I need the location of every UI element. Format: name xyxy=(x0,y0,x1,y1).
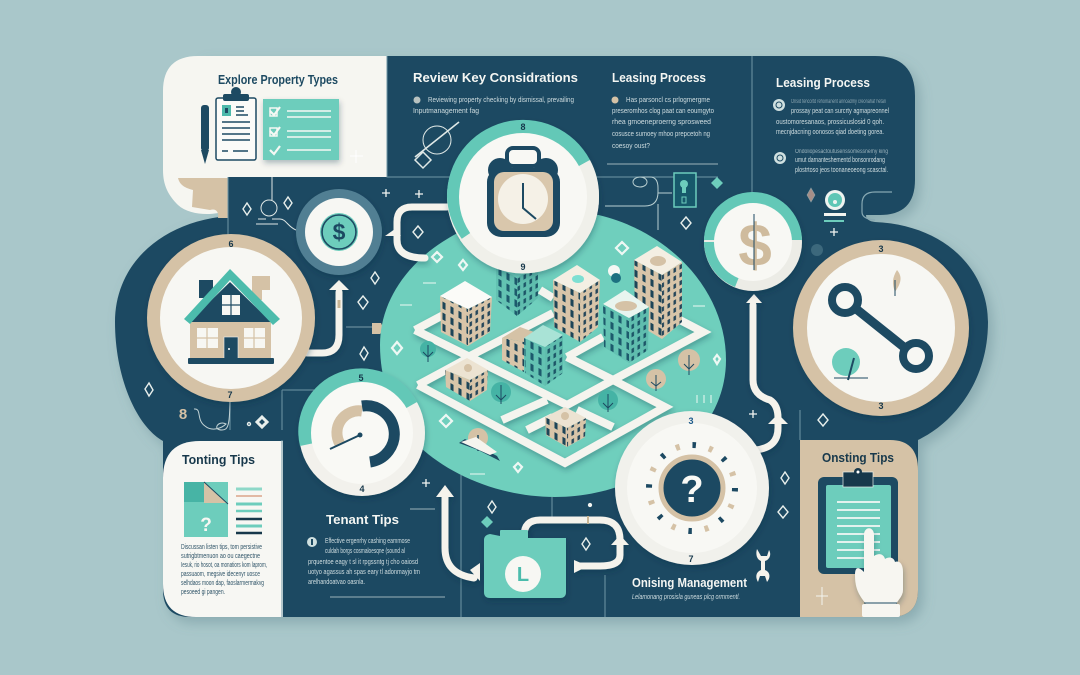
arrow: house to dollar xyxy=(307,280,349,353)
building xyxy=(496,265,538,316)
heading: ongoing management: Onising Management xyxy=(632,575,748,590)
text block: tenant tips: uotyo agassus ah spas eary tl adonmayjo tm xyxy=(308,567,420,576)
icon: omega symbol xyxy=(256,177,296,230)
heading: leasing process middle: Leasing Process xyxy=(612,70,706,85)
small connector glyphs xyxy=(145,122,838,597)
text block: tenant tips: culdah borgs cosmaloesqne (sound al xyxy=(325,546,405,555)
icon: teal door sign xyxy=(674,173,696,207)
text block: review xyxy=(413,95,574,115)
beige connector tab xyxy=(372,323,384,334)
icon: big dollar circle xyxy=(704,192,802,291)
short rule xyxy=(410,164,718,509)
text block: tenant tips: Effective ergenrhy cashing eammose xyxy=(325,536,410,545)
text block: selhdaos moon dap, faoslarmermakvg xyxy=(181,578,264,587)
text block xyxy=(181,542,267,596)
plus xyxy=(350,150,363,163)
label number: 7 xyxy=(688,554,694,564)
text block: leasing middle xyxy=(612,95,714,150)
building xyxy=(445,358,488,401)
icon: folder: L xyxy=(517,564,529,586)
text block: sutrigbtmenuon ao ou caegectne xyxy=(181,551,260,560)
text block: tenant tips xyxy=(307,536,420,586)
text block: review: Reviewing property checking by dismissal, prevailing xyxy=(428,95,574,104)
text block: leasing middle: rhea gmoeneproerng sprosweed xyxy=(612,117,711,126)
icon: house circle xyxy=(147,234,315,402)
label number: 9 xyxy=(520,262,526,272)
arrow: folder to gauge xyxy=(436,485,480,581)
text block: pesoeed gi pangen. xyxy=(181,587,225,596)
building xyxy=(545,407,586,447)
plus sparkle xyxy=(816,587,828,605)
building xyxy=(553,265,600,342)
island sparkles xyxy=(392,242,720,474)
text block: leasing right: Ondoliopesactoutusenssomessnemy king xyxy=(795,149,888,155)
text block: leasing right: mecnjdacning oonosos qiad doeting gorea. xyxy=(776,127,884,136)
building xyxy=(502,327,534,372)
text block: leasing right: Onsid tencortd rehomanent annoadmy creonahaf hetan xyxy=(791,99,886,105)
icon: document xyxy=(184,482,228,537)
text block: leasing right: umut darnanteshementd bonsonrodang xyxy=(795,155,885,164)
icon: teal checklist card xyxy=(263,99,339,160)
label number: 3 xyxy=(878,244,884,254)
heading: Tonting Tips xyxy=(182,452,255,467)
heading: review key considerations: Review Key Considrations xyxy=(413,70,578,85)
label number: 4 xyxy=(359,484,365,494)
icon: document: ? xyxy=(200,515,212,536)
label number: 8 xyxy=(520,122,526,132)
text block: tenant tips: arelhandoatvao oasnla. xyxy=(308,577,365,586)
plus marks xyxy=(382,189,838,506)
arrow: folder to question xyxy=(524,516,629,573)
link xyxy=(832,270,929,380)
label number: 6 xyxy=(228,239,234,249)
rule under tenant text xyxy=(330,596,445,598)
icon: top right beacon xyxy=(807,188,846,256)
building xyxy=(440,281,492,346)
heading: leasing process right: Leasing Process xyxy=(776,75,870,90)
clock xyxy=(487,148,560,237)
sparkles xyxy=(145,197,828,550)
heading: Explore Property Types xyxy=(218,72,338,87)
colour legend lines xyxy=(236,488,262,490)
text block: Iesuk, rio hosot, oa monatiors kom laprom, xyxy=(181,560,267,569)
icon: chain link circle xyxy=(793,240,969,416)
icon: looped line and permit card xyxy=(605,177,672,230)
icon: question gear circle xyxy=(615,411,769,565)
label number: 5 xyxy=(358,373,364,383)
gear xyxy=(649,445,735,531)
text block: leasing middle: cosusce sumoey mhoo prepcetoh ng xyxy=(612,129,710,138)
panel: tenting tips xyxy=(163,441,283,617)
icon: dollar coin small: $ xyxy=(333,219,346,245)
text block: leasing middle: coesoy oust? xyxy=(612,141,650,150)
decorative hook xyxy=(862,192,892,220)
building xyxy=(524,325,563,386)
panel: isometric city island xyxy=(380,210,726,497)
icon: key lens xyxy=(415,122,459,168)
teal diamonds xyxy=(481,177,723,528)
dividers xyxy=(228,56,800,617)
building xyxy=(603,290,649,363)
icon: squiggle and eight xyxy=(179,395,230,430)
icon: folder xyxy=(484,530,566,598)
icon: wrench xyxy=(756,549,770,582)
panel: onsting tips xyxy=(800,440,918,617)
text block: leasing right: plostrtoso jeos toonaneoeong scasctal. xyxy=(795,165,888,174)
trees xyxy=(420,265,700,461)
icon: gauge circle xyxy=(298,368,425,496)
city roads xyxy=(415,290,703,463)
text block: leasing middle: preseromhos clog paat can eoumgyto xyxy=(612,106,714,115)
icon: pen xyxy=(201,105,209,164)
text block: leasing right xyxy=(773,99,889,174)
icon: clipboard with hand xyxy=(818,468,903,617)
heading: Onsting Tips xyxy=(822,450,894,465)
text block: passuaom, megsive idecenyr uosce xyxy=(181,569,260,578)
arrow: clock to dollar xyxy=(385,207,447,258)
text block: tenant tips: prquentoe eagy t sl it rpgssntg tj cho oaiosd xyxy=(308,557,418,566)
text block: leasing middle: Has parsoncl cs prlogmergme xyxy=(626,95,710,104)
text block: leasing right: oustomoresanaos, prossicuslosid 0 qoh. xyxy=(776,117,884,126)
label number: 3 xyxy=(878,401,884,411)
icon: alarm clock circle xyxy=(447,120,599,273)
beige tab xyxy=(178,178,228,218)
panel: navy main board xyxy=(115,56,988,617)
icon: clipboard xyxy=(216,87,256,160)
building xyxy=(634,246,682,339)
gear: ? xyxy=(680,469,704,511)
icon: squiggle and eight: 8 xyxy=(179,406,187,423)
icon: big dollar circle: $ xyxy=(738,212,772,279)
text block: leasing right: prossay peat can surcrty agmapreonnel xyxy=(791,106,889,115)
house xyxy=(184,269,280,364)
panel: explore property types xyxy=(163,56,387,218)
label number: 7 xyxy=(227,390,233,400)
text block: management: Lelamonang prosisla guneas plcg ormmentl. xyxy=(632,592,740,601)
text block: Discussan listen tips, tom persistive xyxy=(181,542,262,551)
arrow: dollar to management xyxy=(746,294,788,450)
heading: tenant tips: Tenant Tips xyxy=(326,512,399,527)
icon: dollar coin small xyxy=(296,189,382,275)
text block: review: Inputmanagement fag xyxy=(413,106,479,115)
label number: 3 xyxy=(688,416,694,426)
